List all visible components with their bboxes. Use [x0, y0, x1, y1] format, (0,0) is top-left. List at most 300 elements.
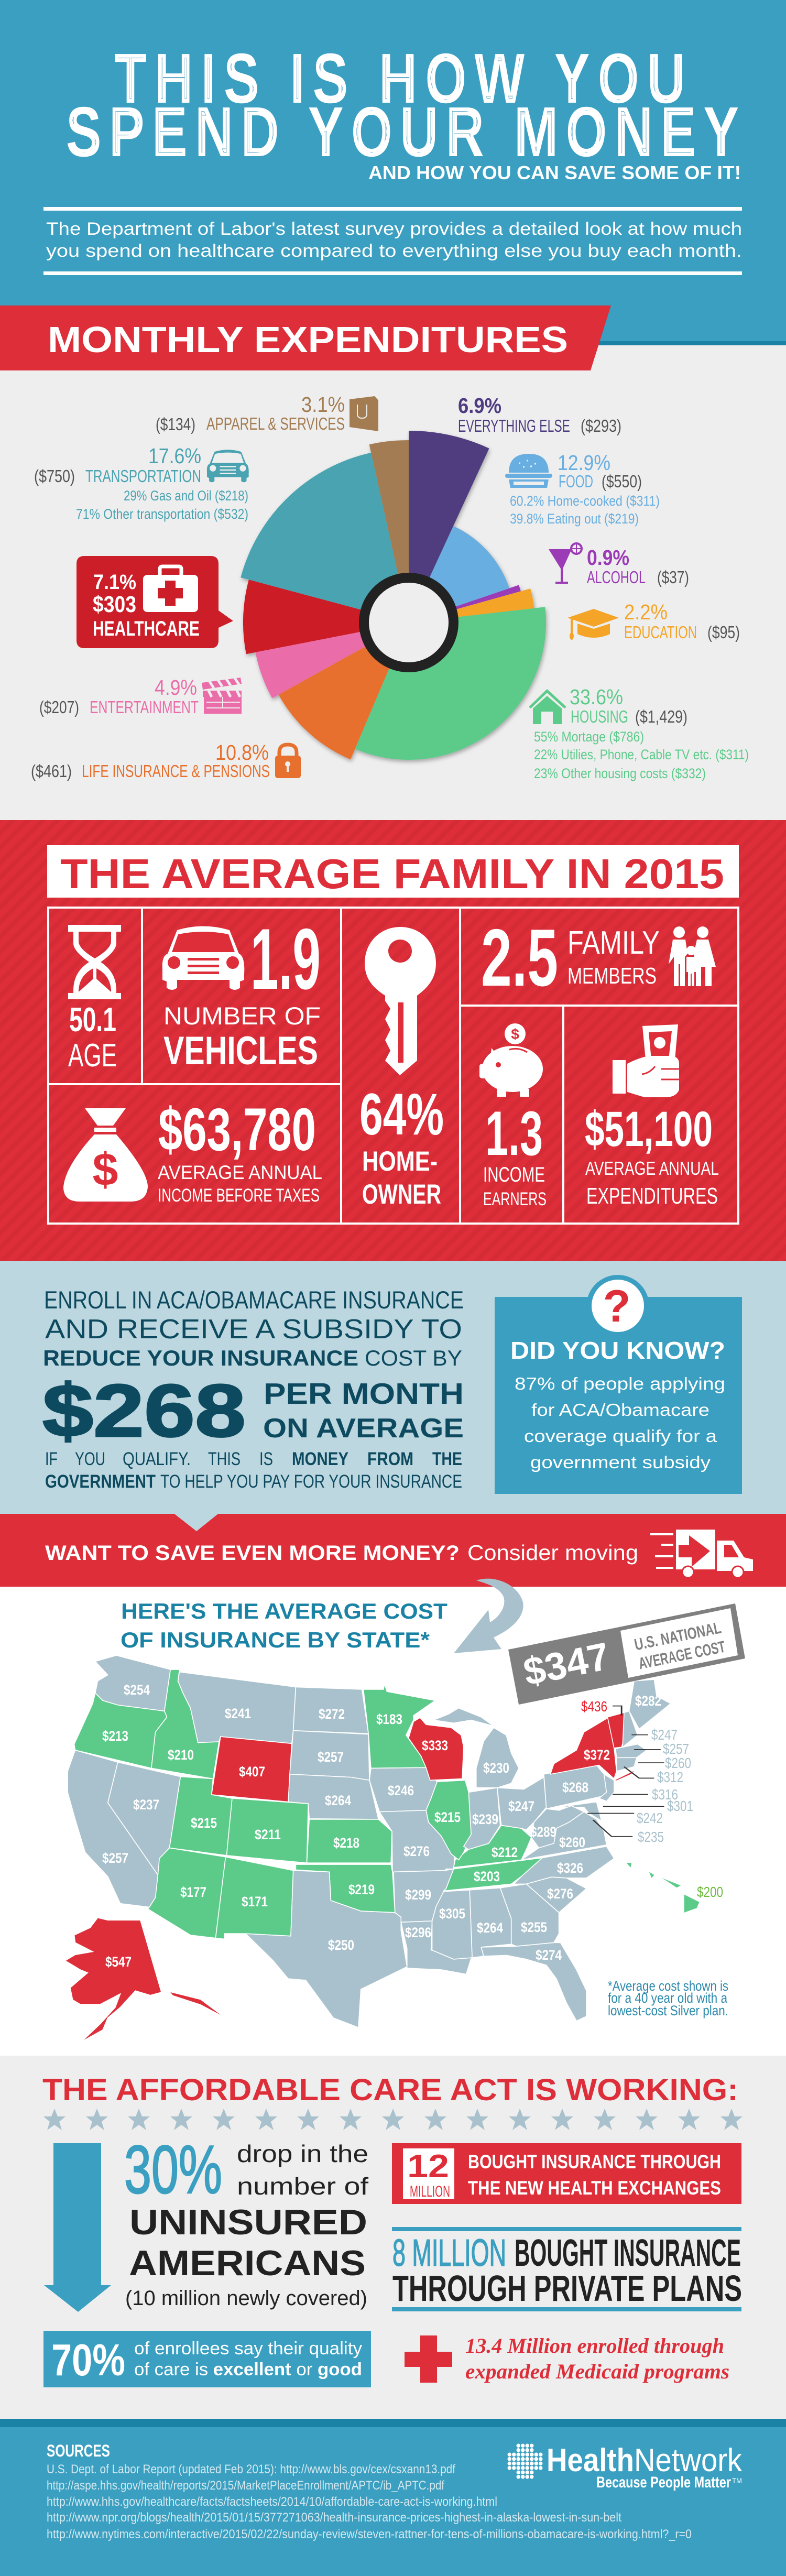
state cost labels on map: $257 [102, 1850, 128, 1866]
state: MI upper [433, 1708, 494, 1726]
cell: income: $63,780 [158, 1096, 316, 1163]
state cost labels on map: $257 [318, 1749, 344, 1765]
callout: healthcare [77, 556, 233, 648]
state cost labels on map [102, 1682, 661, 1970]
panel: did you know: for ACA/Obamacare [531, 1400, 709, 1420]
state: IN [464, 1788, 500, 1849]
slice: healthcare [243, 580, 409, 654]
state: HI [684, 1894, 699, 1913]
icon: moving truck [650, 1530, 753, 1578]
state cost labels outside map: $436 [581, 1698, 607, 1715]
text block: subsidy: PER MONTH [264, 1377, 464, 1411]
cell: family members [481, 912, 716, 1003]
label: life insurance and pensions: LIFE INSURANCE & PENSIONS [82, 761, 270, 781]
banner: want to save: Consider moving [467, 1541, 638, 1565]
label: everything else: EVERYTHING ELSE [458, 416, 570, 435]
text block: subsidy [42, 1286, 464, 1492]
cell: expenditures: EXPENDITURES [586, 1183, 718, 1209]
state cost labels on map: $215 [434, 1809, 461, 1825]
state: VT [607, 1712, 625, 1748]
state cost labels on map: $246 [388, 1783, 414, 1798]
sources [47, 2441, 692, 2541]
panel: did you know: 87% of people applying [515, 1374, 725, 1393]
label: apparel: ($134) [156, 414, 195, 434]
cell: income earners: INCOME [483, 1163, 545, 1186]
state cost labels outside map: $301 [667, 1798, 693, 1814]
state cost labels on map: $183 [376, 1711, 402, 1727]
label: housing: HOUSING [571, 707, 628, 726]
state cost labels on map: $212 [492, 1844, 518, 1860]
state cost labels on map: $211 [255, 1827, 281, 1842]
state: WA [95, 1655, 170, 1711]
slice: education [409, 588, 534, 623]
state: OH [497, 1777, 547, 1830]
leader lines [587, 1706, 664, 1837]
stat: 30 percent: drop in the [237, 2140, 368, 2167]
state: NH [623, 1711, 638, 1747]
panel: footer [0, 2427, 786, 2576]
label: food: ($550) [602, 472, 642, 491]
text block: subsidy: THE [432, 1449, 462, 1469]
state: UT [169, 1776, 232, 1855]
state cost labels on map: $213 [102, 1728, 128, 1744]
label: life insurance and pensions [31, 740, 301, 781]
label: apparel: APPAREL & SERVICES [206, 414, 345, 433]
cell: expenditures: $51,100 [585, 1101, 713, 1157]
label: transportation [34, 444, 249, 522]
state: NC [514, 1847, 614, 1884]
stat: 30 percent: AMERICANS [129, 2243, 366, 2283]
sources: http://aspe.hhs.gov/health/reports/2015/MarketPlaceEnrollment/APTC/ib_APTC.pdf [47, 2479, 444, 2493]
state cost labels on map: $230 [483, 1760, 509, 1776]
label: housing: 22% Utilies, Phone, Cable TV etc. ($311) [534, 747, 749, 762]
cell: vehicles: NUMBER OF [163, 1002, 321, 1030]
icon: car [162, 926, 244, 990]
label: education: EDUCATION [624, 623, 697, 642]
icon: medical kit [143, 566, 198, 612]
state cost labels outside map: $242 [637, 1810, 663, 1826]
badge: national average cost [508, 1603, 745, 1705]
text block: subsidy: IS [259, 1449, 273, 1469]
state cost labels on map: $218 [333, 1835, 359, 1851]
stat: 30 percent: UNINSURED [129, 2202, 367, 2242]
label: food: 39.8% Eating out ($219) [510, 511, 639, 527]
text block: subsidy: IF [45, 1449, 58, 1469]
state: SC [526, 1877, 586, 1913]
state cost labels on map: $247 [508, 1798, 534, 1814]
pie chart [241, 431, 546, 760]
slice: transportation [241, 453, 409, 623]
text block: subsidy: THIS [208, 1449, 241, 1469]
label: everything else: 6.9% [458, 394, 501, 418]
callout: healthcare: 7.1% [93, 571, 136, 594]
banner: want to save [0, 1514, 786, 1587]
state cost labels on map: $272 [319, 1706, 345, 1722]
badge: national average cost: U.S. NATIONAL [632, 1619, 723, 1654]
arrow: down [44, 2143, 111, 2312]
state: AL [470, 1888, 511, 1958]
state cost labels on map: $210 [168, 1747, 194, 1763]
panel: did you know: coverage qualify for a [524, 1426, 717, 1446]
icon: cocktail glass [549, 543, 582, 584]
sources: http://www.npr.org/blogs/health/2015/01/15/377271063/health-insurance-prices-highest-in-alaska-lowest-in-sun-belt [47, 2510, 621, 2525]
label: everything else: ($293) [581, 416, 621, 435]
state cost labels on map: $276 [547, 1886, 573, 1902]
banner: monthly expenditures [0, 305, 611, 370]
state: MT [178, 1672, 296, 1743]
state cost labels on map: $276 [403, 1843, 430, 1859]
heading: the average family: THE AVERAGE FAMILY IN 2015 [60, 850, 724, 897]
map: United States [65, 1655, 699, 2042]
banner: monthly expenditures: MONTHLY EXPENDITURES [48, 319, 568, 360]
state cost labels on map: $239 [472, 1811, 498, 1827]
icon: car [207, 450, 249, 482]
state: HI islands [649, 1872, 654, 1878]
state cost labels on map: $264 [477, 1920, 503, 1936]
state: WV [531, 1806, 584, 1848]
text block: subsidy: MONEY [292, 1449, 348, 1469]
icon: clapperboard [202, 678, 242, 714]
icon: dotted cross [507, 2443, 543, 2479]
cell: age [68, 925, 121, 1074]
label: food: 12.9% [558, 451, 610, 475]
icon: shopping bag [350, 396, 378, 431]
arrow: curved to national average [454, 1579, 523, 1653]
state: LA [401, 1921, 474, 1974]
sources: SOURCES [47, 2441, 110, 2460]
heading: ACA working: THE AFFORDABLE CARE ACT IS WORKING: [42, 2073, 738, 2107]
panel: ACA working [0, 2056, 786, 2419]
state cost labels on map: $326 [557, 1860, 583, 1876]
cell: income earners: 1.3 [485, 1098, 543, 1169]
label: food: 60.2% Home-cooked ($311) [510, 493, 660, 509]
stat: 30 percent: 30% [124, 2131, 222, 2208]
stat: 12 million: MILLION [410, 2183, 450, 2200]
logo: HealthNetwork: Network [634, 2442, 743, 2479]
cell: income: AVERAGE ANNUAL [158, 1162, 322, 1183]
state: PA [544, 1765, 609, 1809]
state cost labels on map: $282 [635, 1693, 661, 1709]
badge: national average cost: AVERAGE COST [637, 1638, 727, 1673]
state cost labels on map: $407 [239, 1764, 265, 1780]
state cost labels on map: $171 [242, 1894, 268, 1909]
stat: 12 million: THE NEW HEALTH EXCHANGES [468, 2177, 721, 2199]
stat: 8 million [392, 2227, 742, 2311]
label: transportation: TRANSPORTATION [85, 466, 201, 486]
state: AR [394, 1869, 454, 1922]
stat: 30 percent: (10 million newly covered) [125, 2287, 367, 2310]
label: housing: ($1,429) [635, 707, 687, 726]
icon: family [669, 926, 716, 986]
sources: http://www.nytimes.com/interactive/2015/02/22/sunday-review/steven-rattner-for-tens-of-millions-obamacare-is-working.html?_r=0 [47, 2527, 692, 2541]
cell: family members: FAMILY [567, 925, 660, 961]
state cost labels on map: $215 [191, 1815, 217, 1831]
text block: subsidy: ON AVERAGE [263, 1413, 464, 1444]
intro paragraph [46, 219, 742, 261]
state: TN [444, 1858, 542, 1891]
stat: 70 percent [43, 2331, 371, 2387]
cell: family members: MEMBERS [567, 963, 657, 989]
icon: piggy bank [479, 1023, 543, 1097]
state cost labels outside map: $235 [638, 1829, 664, 1845]
state: NV [108, 1762, 180, 1875]
label: food: FOOD [559, 472, 593, 491]
state cost labels on map: $289 [530, 1824, 556, 1840]
cell: income earners [479, 1023, 547, 1209]
state: GA [500, 1884, 559, 1946]
state: VA [521, 1812, 606, 1860]
label: alcohol [549, 543, 689, 587]
label: education: 2.2% [624, 600, 668, 624]
cell: home owner: 64% [359, 1082, 444, 1147]
title: THIS IS HOW YOU [114, 39, 685, 118]
stat: 70 percent: 70% [51, 2335, 125, 2385]
footer strip [0, 2419, 786, 2427]
text block: subsidy: QUALIFY. [123, 1449, 191, 1469]
label: apparel [156, 392, 378, 434]
title [66, 39, 739, 171]
icon: question mark: ? [603, 1281, 630, 1331]
text block: subsidy: COST BY [365, 1346, 462, 1370]
stat: 12 million [392, 2143, 741, 2204]
label: life insurance and pensions: ($461) [31, 761, 72, 781]
state: ID [151, 1669, 219, 1778]
state: ND [293, 1687, 368, 1733]
slice: life insurance [279, 623, 409, 759]
state cost labels on map: $333 [422, 1738, 448, 1753]
state: IA [369, 1767, 437, 1812]
heading: average cost by state [121, 1599, 447, 1652]
state cost labels on map: $296 [405, 1925, 431, 1940]
state cost labels on map: $237 [133, 1797, 159, 1813]
logo: HealthNetwork: Because People Matter [596, 2474, 731, 2491]
state cost labels outside map: $247 [651, 1727, 678, 1743]
footnote: *Average cost shown is [608, 1978, 728, 1994]
stat: 8 million: 8 MILLION [392, 2232, 506, 2274]
state: CA [68, 1750, 158, 1907]
state: AZ [148, 1848, 225, 1938]
stat: 70 percent: of enrollees say their quality [134, 2339, 362, 2359]
icon: burger [505, 454, 552, 488]
state: AK islands [170, 1992, 221, 2015]
icon: piggy bank: $ [511, 1026, 519, 1042]
subtitle: AND HOW YOU CAN SAVE SOME OF IT! [368, 162, 741, 183]
intro paragraph: The Department of Labor's latest survey provides a detailed look at how much [46, 219, 742, 239]
icon: key [365, 927, 436, 1075]
state: KY [454, 1825, 531, 1868]
cell: expenditures: AVERAGE ANNUAL [585, 1158, 719, 1179]
state cost labels on map: $305 [439, 1906, 465, 1922]
label: transportation: 17.6% [148, 444, 201, 468]
panel: average family [0, 820, 786, 1261]
slice: alcohol [409, 585, 521, 623]
label: transportation: 71% Other transportation ($532) [76, 506, 248, 522]
logo: HealthNetwork: Health [547, 2442, 634, 2479]
sources: U.S. Dept. of Labor Report (updated Feb 2015): http://www.bls.gov/cex/csxann13.pdf [47, 2462, 455, 2476]
icon: house [529, 689, 566, 724]
slice: food [409, 526, 509, 623]
state: TX [246, 1871, 407, 2027]
slice: everything else [409, 431, 489, 623]
cell: age: 50.1 [69, 1000, 116, 1039]
state cost labels on map: $203 [474, 1869, 500, 1884]
state cost labels outside map: $257 [663, 1741, 689, 1757]
state cost labels on map: $177 [180, 1884, 206, 1900]
text block: subsidy: $268 [42, 1369, 246, 1453]
heading: average cost by state: OF INSURANCE BY STATE* [121, 1628, 430, 1652]
label: entertainment: 4.9% [155, 675, 197, 700]
state cost labels outside map [581, 1698, 723, 1900]
state: WY [212, 1737, 292, 1802]
state: NJ [599, 1774, 614, 1802]
state: HI islands west [627, 1863, 631, 1868]
text block: subsidy: GOVERNMENT [45, 1471, 156, 1492]
state: SD [290, 1731, 369, 1780]
state: IL [426, 1780, 471, 1860]
stat: medicaid [465, 2334, 729, 2383]
donut hole [364, 577, 454, 668]
label: life insurance and pensions: 10.8% [215, 740, 269, 765]
icon: question mark [592, 1280, 644, 1332]
state cost labels on map: $255 [521, 1919, 547, 1935]
banner: want to save: WANT TO SAVE EVEN MORE MONEY? [45, 1542, 460, 1565]
label: entertainment [39, 675, 242, 717]
cell: vehicles: 1.9 [250, 911, 321, 1007]
state cost labels outside map: $312 [657, 1769, 683, 1785]
label: alcohol: ($37) [657, 567, 689, 587]
state: NE [288, 1774, 378, 1819]
panel: insurance by state [0, 1587, 786, 2056]
panel: did you know [495, 1275, 742, 1494]
text block: subsidy: AND RECEIVE A SUBSIDY TO [45, 1314, 462, 1345]
intro paragraph: you spend on healthcare compared to everything else you buy each month. [46, 241, 742, 261]
text block: subsidy: ENROLL IN ACA/OBAMACARE INSURANCE [44, 1286, 464, 1314]
state cost labels on map: $264 [325, 1793, 351, 1808]
state cost labels on map: $250 [328, 1937, 354, 1953]
state: OK [296, 1864, 395, 1913]
label: education: ($95) [707, 623, 740, 642]
state cost labels on map: $268 [562, 1780, 588, 1795]
cell: expenditures [585, 1024, 719, 1209]
stat: 30 percent [124, 2131, 368, 2310]
slice: entertainment [256, 623, 409, 698]
state cost labels on map: $219 [348, 1882, 375, 1897]
slice: apparel [369, 440, 409, 623]
cell: vehicles [162, 911, 321, 1073]
footnote [608, 1978, 728, 2018]
label: entertainment: ($207) [39, 697, 79, 717]
state cost labels on map: $241 [225, 1706, 251, 1721]
icon: money bag: $ [93, 1143, 118, 1195]
state cost labels on map: $254 [124, 1682, 150, 1698]
text block: subsidy: YOU [75, 1449, 105, 1469]
cell: age: AGE [68, 1038, 117, 1074]
label: housing: 23% Other housing costs ($332) [534, 766, 706, 781]
stat: 12 million: BOUGHT INSURANCE THROUGH [468, 2151, 721, 2173]
icon: graduation cap [567, 609, 619, 640]
cell: income [63, 1096, 322, 1206]
cell: home owner: HOME- [362, 1146, 438, 1177]
logo: HealthNetwork [507, 2442, 743, 2491]
cell: home owner [359, 927, 444, 1210]
panel: monthly expenditures background [0, 345, 786, 820]
label: alcohol: ALCOHOL [587, 567, 646, 587]
label: entertainment: ENTERTAINMENT [90, 697, 199, 717]
label: food [505, 451, 660, 527]
state: MN [364, 1684, 435, 1768]
panel: subsidy [0, 1261, 786, 1514]
state: MS [432, 1890, 472, 1959]
state: NY [550, 1717, 617, 1778]
stat: medicaid: expanded Medicaid programs [465, 2360, 729, 2383]
cell: vehicles: VEHICLES [163, 1029, 318, 1073]
cell: income: INCOME BEFORE TAXES [158, 1185, 320, 1206]
icon: padlock [275, 745, 301, 778]
state: NM [215, 1857, 293, 1939]
state: WI [409, 1718, 464, 1780]
state cost labels on map: $547 [105, 1954, 132, 1970]
state cost labels outside map: $316 [652, 1786, 678, 1803]
cell: family members: 2.5 [481, 912, 558, 1003]
state cost labels outside map: $260 [665, 1755, 691, 1771]
label: housing [529, 685, 749, 781]
text block: subsidy: REDUCE YOUR INSURANCE [43, 1346, 358, 1370]
logo: HealthNetwork: TM [732, 2476, 742, 2485]
label: apparel: 3.1% [301, 392, 345, 417]
label: transportation: 29% Gas and Oil ($218) [124, 488, 248, 504]
text block: subsidy: TO HELP YOU PAY FOR YOUR INSURANCE [160, 1471, 462, 1492]
cell: home owner: OWNER [362, 1179, 441, 1210]
panel: did you know: DID YOU KNOW? [510, 1337, 725, 1364]
state: NY Long Island [614, 1770, 636, 1781]
state: CT [617, 1758, 637, 1771]
title: SPEND YOUR MONEY [66, 93, 739, 171]
state: OR [74, 1693, 167, 1768]
stat: medicaid: 13.4 Million enrolled through [465, 2334, 724, 2357]
stat: 70 percent: of care is excellent or good [134, 2360, 362, 2379]
stat: 12 million: 12 [407, 2148, 449, 2185]
state: MI [476, 1728, 519, 1788]
slice: housing [355, 607, 546, 760]
label: education [567, 600, 740, 642]
icon: money bag [63, 1108, 148, 1202]
star row [43, 2109, 743, 2130]
state: ME [629, 1679, 671, 1729]
cell: income earners: EARNERS [483, 1189, 547, 1209]
callout: healthcare: $303 [93, 592, 136, 617]
label: alcohol: 0.9% [587, 545, 629, 570]
state: MO [379, 1810, 455, 1872]
panel: header background [0, 0, 786, 341]
label: housing: 55% Mortage ($786) [534, 729, 644, 745]
sources: http://www.hhs.gov/healthcare/facts/factsheets/2014/10/affordable-care-act-is-working.html [47, 2495, 497, 2509]
icon: red cross [405, 2335, 452, 2383]
panel: did you know: government subsidy [530, 1453, 711, 1472]
badge: national average cost: $347 [520, 1634, 613, 1694]
dark strip under header [0, 341, 786, 345]
callout: healthcare: HEALTHCARE [93, 617, 200, 640]
state: FL [481, 1942, 586, 2021]
stat: 30 percent: number of [237, 2173, 368, 2200]
state cost labels on map: $274 [536, 1947, 562, 1963]
state cost labels on map: $260 [559, 1835, 585, 1850]
heading: average cost by state: HERE'S THE AVERAGE COST [121, 1599, 447, 1623]
state cost labels outside map: $200 [697, 1884, 723, 1900]
icon: hourglass [68, 925, 121, 999]
label: everything else [458, 394, 621, 435]
state: AK [65, 1918, 161, 2042]
state: MA [616, 1744, 647, 1758]
